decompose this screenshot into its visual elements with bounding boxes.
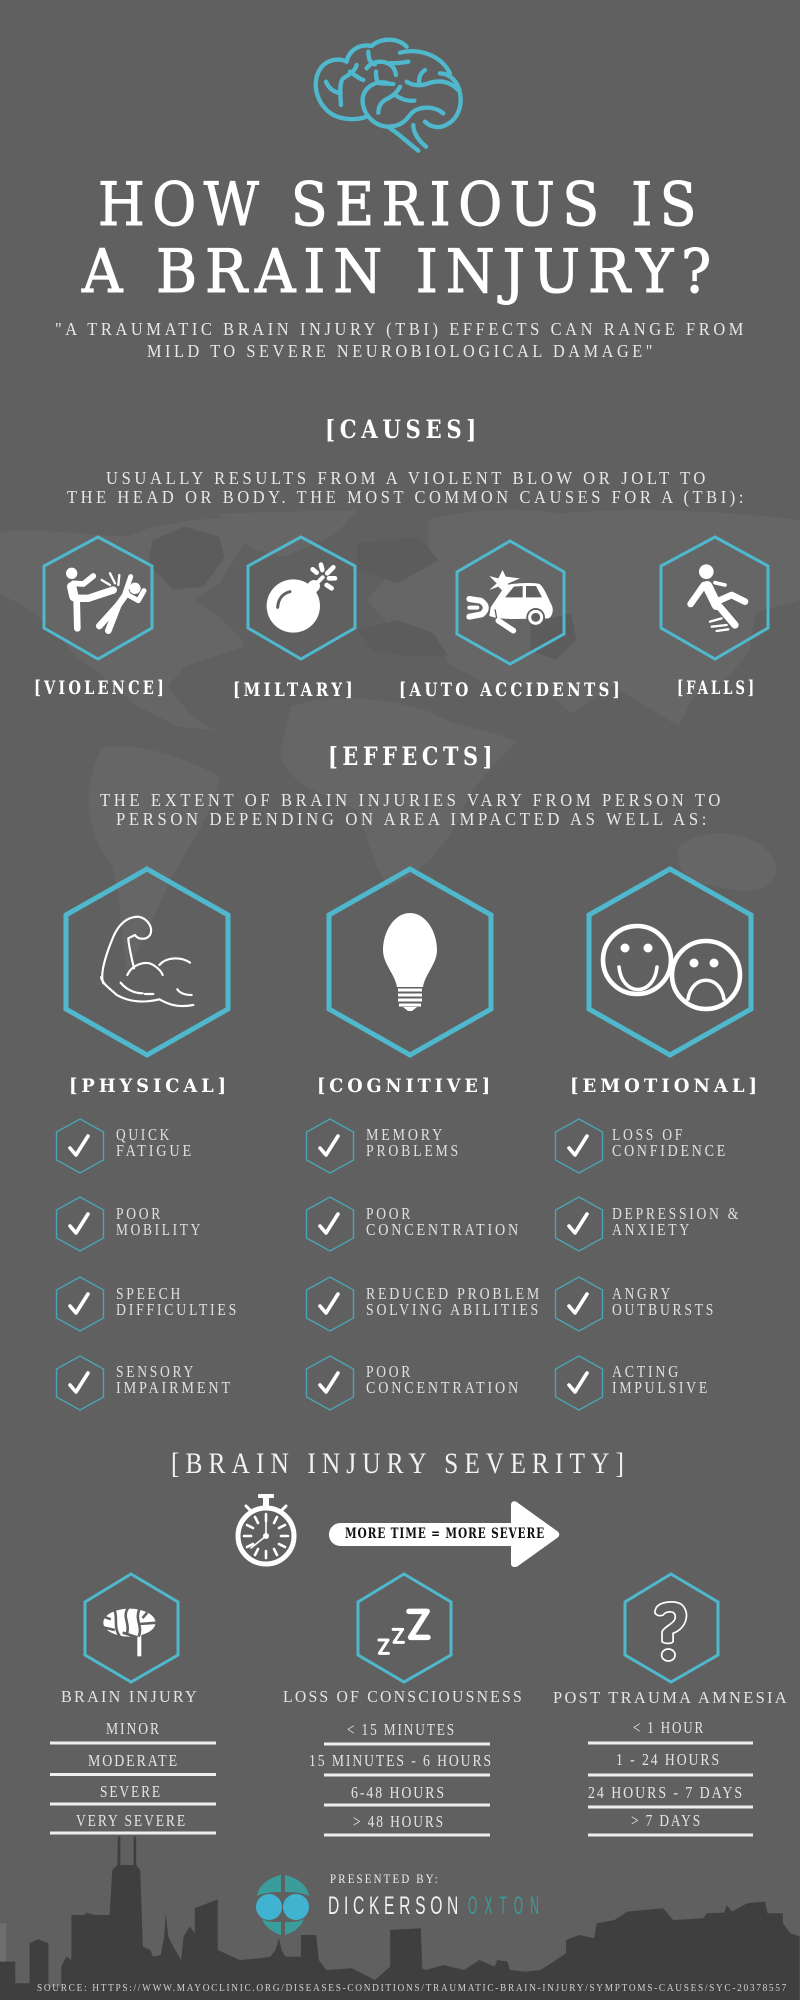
cause labels: [MILTARY] xyxy=(233,679,356,701)
title xyxy=(81,170,719,307)
icon: logo mark xyxy=(256,1875,309,1935)
heading: effects: [EFFECTS] xyxy=(328,742,497,771)
cause: falls xyxy=(661,537,768,659)
column: loss of consciousness: > 48 HOURS xyxy=(353,1812,445,1831)
column: brain injury: VERY SEVERE xyxy=(76,1811,187,1830)
subtitle quote: MILD TO SEVERE NEUROBIOLOGICAL DAMAGE" xyxy=(147,341,656,361)
effects intro text: PERSON DEPENDING ON AREA IMPACTED AS WELL AS: xyxy=(116,809,710,829)
column: post trauma amnesia: 24 HOURS - 7 DAYS xyxy=(588,1783,744,1802)
physical list: FATIGUE xyxy=(116,1141,194,1160)
column: brain injury: BRAIN INJURY xyxy=(61,1687,199,1706)
icon: brain logo xyxy=(316,40,461,151)
column: post trauma amnesia: 1 - 24 HOURS xyxy=(616,1750,721,1769)
arrow: more time = more severe xyxy=(329,1501,559,1567)
cognitive list: PROBLEMS xyxy=(366,1141,461,1160)
cause labels xyxy=(34,677,757,701)
physical list: MOBILITY xyxy=(116,1220,203,1239)
emotional list: ANXIETY xyxy=(612,1220,692,1239)
causes intro text: THE HEAD OR BODY. THE MOST COMMON CAUSES FOR A (TBI): xyxy=(67,487,747,508)
column: post trauma amnesia xyxy=(553,1688,789,1836)
physical list: SENSORY xyxy=(116,1362,196,1381)
presented by logo: DICKERSON xyxy=(328,1892,463,1920)
column: loss of consciousness xyxy=(283,1687,524,1836)
cause: auto accidents xyxy=(457,541,564,664)
column: post trauma amnesia: > 7 DAYS xyxy=(631,1811,702,1830)
physical list xyxy=(56,1119,239,1410)
effect: physical icon xyxy=(66,869,228,1055)
subtitle quote: "A TRAUMATIC BRAIN INJURY (TBI) EFFECTS CAN RANGE FROM xyxy=(55,319,747,340)
subtitle quote xyxy=(55,319,747,361)
column: brain injury xyxy=(50,1687,216,1834)
effect column labels: [EMOTIONAL] xyxy=(570,1075,761,1097)
physical list: POOR xyxy=(116,1204,163,1223)
text: OXTON xyxy=(468,1892,546,1920)
emotional list: ANGRY xyxy=(612,1284,673,1303)
effect column labels: [PHYSICAL] xyxy=(69,1075,230,1097)
column: loss of consciousness: 6-48 HOURS xyxy=(351,1783,446,1802)
cognitive list: CONCENTRATION xyxy=(366,1220,521,1239)
cognitive list: REDUCED PROBLEM xyxy=(366,1284,542,1303)
presented by logo: PRESENTED BY: xyxy=(330,1871,440,1886)
column: loss of consciousness: 15 MINUTES - 6 HOURS xyxy=(309,1751,493,1770)
column: loss of consciousness: < 15 MINUTES xyxy=(347,1720,456,1739)
heading: causes: [CAUSES] xyxy=(325,415,481,444)
emotional list: CONFIDENCE xyxy=(612,1141,728,1160)
column: brain injury: SEVERE xyxy=(100,1782,162,1801)
title: HOW SERIOUS IS xyxy=(98,170,704,240)
column: post trauma amnesia: POST TRAUMA AMNESIA xyxy=(553,1688,789,1707)
city skyline xyxy=(0,1837,800,2000)
effect column labels: [COGNITIVE] xyxy=(317,1075,494,1097)
physical list: SPEECH xyxy=(116,1284,183,1303)
cause labels: [AUTO ACCIDENTS] xyxy=(399,679,623,701)
emotional list: ACTING xyxy=(612,1362,681,1381)
effects intro text xyxy=(100,790,724,829)
emotional list: OUTBURSTS xyxy=(612,1300,716,1319)
column: post trauma amnesia: < 1 HOUR xyxy=(633,1718,705,1737)
emotional list: LOSS OF xyxy=(612,1125,685,1144)
effect: emotional icon xyxy=(589,869,751,1055)
cognitive list: POOR xyxy=(366,1362,413,1381)
icon: stopwatch xyxy=(238,1494,294,1564)
arrow: more time = more severe: MORE TIME = MORE SEVERE xyxy=(345,1526,545,1542)
cause labels: [FALLS] xyxy=(677,677,757,699)
physical list: IMPAIRMENT xyxy=(116,1378,233,1397)
cause labels: [VIOLENCE] xyxy=(34,677,167,699)
physical list: QUICK xyxy=(116,1125,172,1144)
title: A BRAIN INJURY? xyxy=(81,237,719,307)
cognitive list xyxy=(306,1119,542,1410)
severity icon: brain xyxy=(85,1574,178,1682)
emotional list: DEPRESSION & xyxy=(612,1204,741,1223)
emotional list: IMPULSIVE xyxy=(612,1378,710,1397)
effect: cognitive icon xyxy=(329,869,491,1055)
cognitive list: POOR xyxy=(366,1204,413,1223)
column: brain injury: MODERATE xyxy=(88,1751,179,1770)
cognitive list: CONCENTRATION xyxy=(366,1378,521,1397)
heading: brain injury severity: [BRAIN INJURY SEVERITY] xyxy=(171,1447,630,1480)
cognitive list: SOLVING ABILITIES xyxy=(366,1300,541,1319)
causes intro text xyxy=(67,468,747,508)
world map background xyxy=(0,510,800,970)
column: loss of consciousness: LOSS OF CONSCIOUSNESS xyxy=(283,1687,524,1706)
emotional list xyxy=(556,1119,741,1410)
effects intro text: THE EXTENT OF BRAIN INJURIES VARY FROM PERSON TO xyxy=(100,790,724,810)
effect column labels xyxy=(69,1075,761,1097)
cause: violence xyxy=(44,537,152,659)
cognitive list: MEMORY xyxy=(366,1125,445,1144)
presented by logo xyxy=(256,1871,546,1935)
severity icon: zzz xyxy=(358,1574,451,1682)
causes intro text: USUALLY RESULTS FROM A VIOLENT BLOW OR JOLT TO xyxy=(106,468,709,488)
column: brain injury: MINOR xyxy=(106,1719,161,1738)
physical list: DIFFICULTIES xyxy=(116,1300,239,1319)
severity icon: question mark xyxy=(625,1574,718,1682)
cause: military xyxy=(248,537,355,659)
